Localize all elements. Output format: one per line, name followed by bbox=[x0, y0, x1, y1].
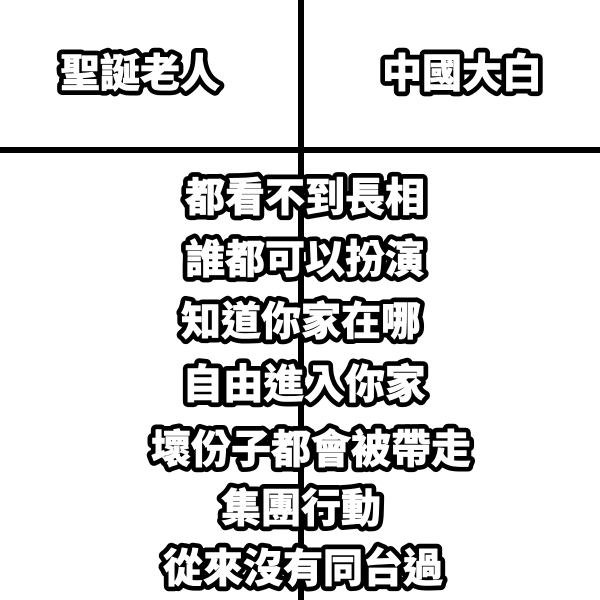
row: enters your home freely: 自由進入你家 bbox=[182, 361, 426, 407]
row: face never seen: 都看不到長相 bbox=[185, 176, 425, 220]
row: bad kids get taken away: 壞份子都會被帶走 bbox=[151, 428, 471, 472]
row: never seen together: 從來沒有同台過 bbox=[163, 546, 443, 591]
heading: Baymax: 中國大白 bbox=[382, 52, 542, 96]
row: anyone can play the role: 誰都可以扮演 bbox=[185, 238, 425, 282]
row: face never seen: 都看不到長相 bbox=[185, 176, 425, 220]
heading: Santa Claus: 聖誕老人 bbox=[60, 52, 220, 96]
row: enters your home freely: 自由進入你家 bbox=[182, 361, 426, 407]
heading: Baymax: 中國大白 bbox=[382, 52, 542, 96]
row: knows where your home is: 知道你家在哪 bbox=[181, 300, 421, 344]
row: act in groups: 集團行動 bbox=[221, 487, 381, 531]
heading: Santa Claus: 聖誕老人 bbox=[60, 52, 220, 96]
row: anyone can play the role: 誰都可以扮演 bbox=[185, 238, 425, 282]
row: bad kids get taken away: 壞份子都會被帶走 bbox=[151, 428, 471, 472]
row: knows where your home is: 知道你家在哪 bbox=[181, 300, 421, 344]
row: never seen together: 從來沒有同台過 bbox=[163, 546, 443, 591]
row: act in groups: 集團行動 bbox=[221, 487, 381, 531]
